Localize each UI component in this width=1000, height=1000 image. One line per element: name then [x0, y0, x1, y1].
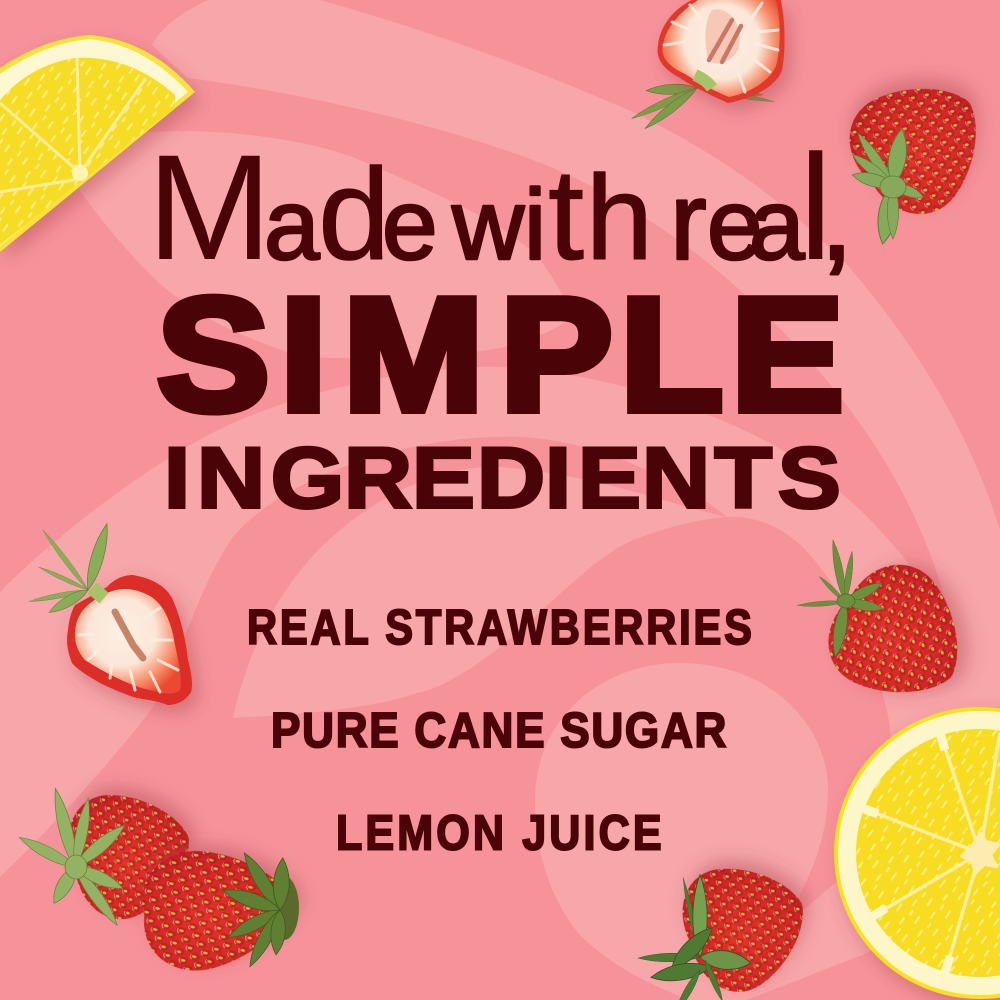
- crown of cut strawberry left: [29, 522, 113, 617]
- heading: SIMPLE: SIMPLE: [157, 265, 844, 444]
- heading: Made with real,: M: [147, 123, 272, 291]
- swirl centre blob: [535, 663, 828, 1000]
- lemon wedge top left: [0, 35, 195, 252]
- whole strawberry right: [797, 539, 992, 728]
- crown: [221, 849, 299, 970]
- swirl band: upper arc: [152, 0, 1000, 640]
- heading: Made with real,: a: [264, 169, 320, 281]
- heading: Made with real,: e: [707, 169, 763, 281]
- heading: Made with real,: h: [586, 151, 653, 285]
- swirl band: leaf behind heading: [78, 131, 570, 360]
- heading: INGREDIENTS: INGREDIENTS: [164, 430, 841, 527]
- heading: Made with real,: l: [799, 123, 832, 291]
- heading: Made with real,: i: [524, 169, 546, 281]
- crown: [849, 127, 925, 246]
- whole strawberry bottom centre: [638, 845, 824, 1000]
- ingredient: lemon juice: LEMON JUICE: [336, 805, 662, 860]
- heading: Made with real,: r: [670, 160, 707, 283]
- swirl band: inner leaf: [233, 467, 727, 718]
- swirl band: wrap-around arc: [0, 367, 1000, 1000]
- crown: [17, 787, 129, 929]
- lemon slice bottom right: [834, 707, 1000, 999]
- whole strawberry bottom left: [17, 777, 205, 929]
- whole strawberry top right: [830, 53, 1000, 246]
- crown: [638, 875, 752, 1000]
- heading: Made with real,: ,: [820, 151, 853, 285]
- ingredient: pure cane sugar: PURE CANE SUGAR: [271, 703, 726, 758]
- crown of cut strawberry top: [630, 83, 774, 132]
- heading: Made with real,: a: [749, 169, 805, 281]
- heading: Made with real,: d: [318, 141, 390, 287]
- crown: [797, 539, 885, 658]
- ingredient: real strawberries: REAL STRAWBERRIES: [247, 600, 752, 655]
- whole strawberry bottom: [138, 843, 299, 975]
- heading: Made with real,: e: [382, 169, 438, 281]
- cut strawberry top: [630, 0, 785, 132]
- heading: Made with real,: t: [548, 141, 584, 287]
- cut strawberry left: [29, 522, 192, 705]
- heading: Made with real,: w: [451, 169, 525, 281]
